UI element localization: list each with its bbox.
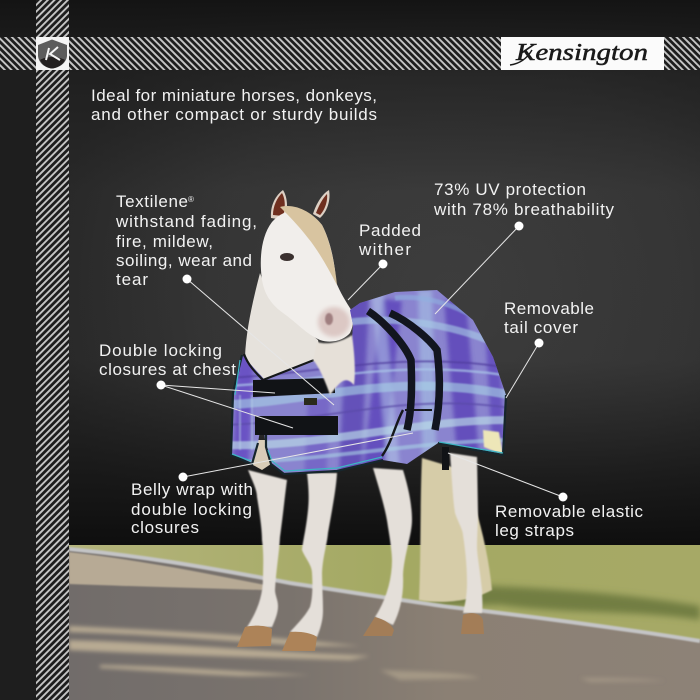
callout: UV protection: 73% UV protection: [434, 180, 586, 199]
heading: suitability text: [91, 86, 377, 124]
callout: Textilene: soiling, wear and: [116, 251, 252, 270]
callout: Textilene: fire, mildew,: [116, 232, 213, 251]
callout: UV protection: with 78% breathability: [433, 200, 614, 219]
left dark column: [0, 70, 36, 700]
callout: Removable tail cover: tail cover: [504, 318, 578, 337]
callout: Textilene: ®: [188, 195, 194, 204]
striped vertical band: [36, 0, 69, 700]
callout: Belly wrap: Belly wrap with: [131, 480, 253, 499]
callout: Belly wrap: [131, 433, 413, 537]
callout: Removable elastic leg straps: leg straps: [495, 521, 574, 540]
striped horizontal band: [0, 37, 700, 70]
callout: Padded wither: [348, 221, 421, 300]
horse head and neck: [245, 190, 353, 388]
callout: Double locking closures at chest: Double locking: [99, 341, 222, 360]
callout: Textilene: Textilene: [116, 192, 188, 211]
callout: Textilene: tear: [116, 270, 148, 289]
callout: Removable tail cover: [504, 299, 594, 398]
horse fly sheet: purple plaid: [225, 285, 510, 480]
logo: Kensington wordmark: Kensington: [515, 40, 648, 66]
fly sheet binding and edging: [231, 354, 506, 474]
callout: Padded wither: wither: [358, 240, 411, 259]
callout: Belly wrap: closures: [131, 518, 199, 537]
callout: Padded wither: Padded: [359, 221, 421, 240]
fly sheet belly straps: [368, 311, 439, 430]
callout: Removable elastic leg straps: Removable elastic: [495, 502, 644, 521]
callout: Belly wrap: double locking: [131, 500, 252, 519]
callout: Removable elastic leg straps: [448, 453, 644, 540]
horse legs and hooves: [237, 440, 484, 651]
photo ground: grass and gravel path: [69, 545, 700, 700]
mane hanging over sheet: [313, 335, 355, 395]
callout: Double locking closures at chest: [99, 341, 293, 428]
callout: Textilene: withstand fading,: [115, 212, 257, 231]
heading: suitability text: Ideal for miniature horses, donkeys,: [91, 86, 377, 105]
callout: Double locking closures at chest: closures at chest: [99, 360, 236, 379]
horse tail: [419, 458, 492, 602]
logo: Kensington wordmark: [501, 37, 664, 70]
chest closures: [253, 378, 449, 470]
icon: Kensington shield logo: [36, 37, 69, 70]
heading: suitability text: and other compact or sturdy builds: [91, 105, 377, 124]
callout: Textilene: [115, 192, 334, 405]
callout: Removable tail cover: Removable: [504, 299, 594, 318]
callout: UV protection: [433, 180, 614, 314]
